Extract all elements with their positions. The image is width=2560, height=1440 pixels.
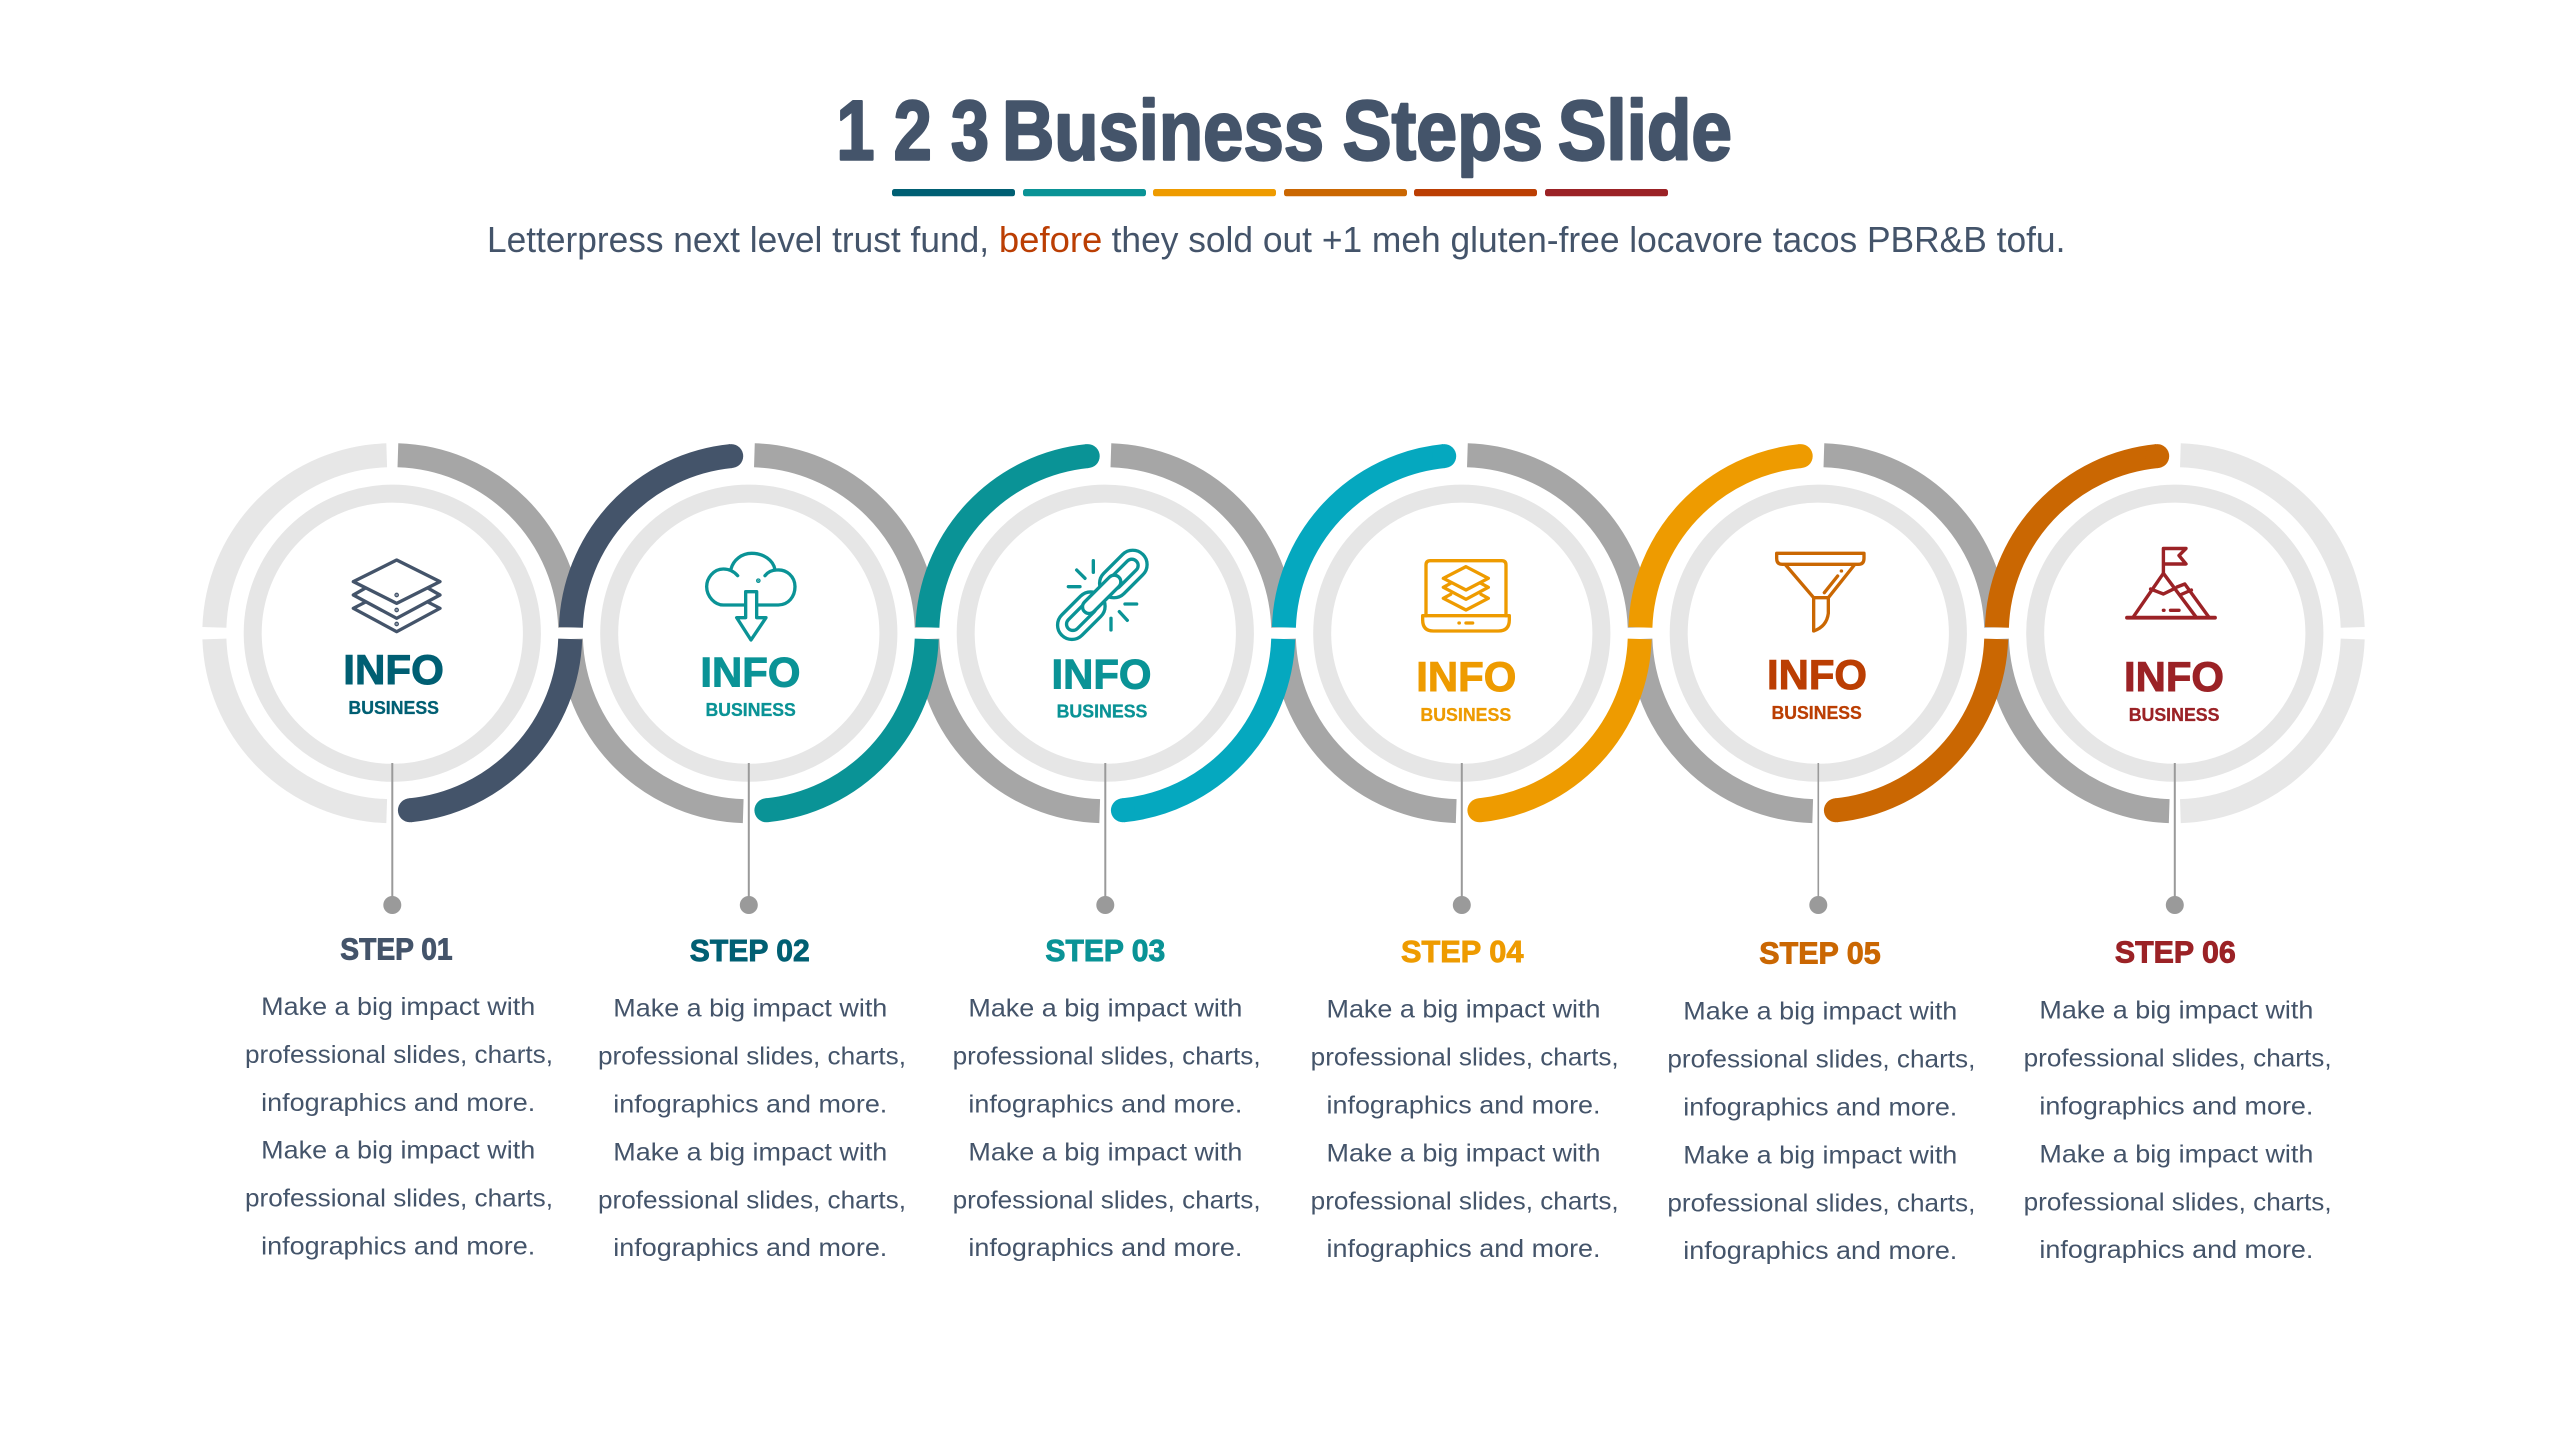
- description: infographics and more.: [1326, 1235, 1600, 1263]
- description: professional slides, charts,: [598, 1043, 906, 1071]
- description: Make a big impact with: [613, 995, 887, 1023]
- title: Steps: [1342, 84, 1543, 178]
- step heading: STEP 06: [2115, 934, 2236, 970]
- icon: funnel: [1777, 553, 1864, 631]
- description: infographics and more.: [613, 1234, 887, 1262]
- circle label: [2124, 653, 2224, 725]
- description: infographics and more.: [613, 1090, 887, 1118]
- panel: step 02: [571, 444, 927, 1262]
- description: professional slides, charts,: [245, 1185, 553, 1213]
- description: Make a big impact with: [1326, 996, 1600, 1024]
- circle label: INFO: [1052, 650, 1152, 697]
- title colour bars: [892, 189, 1668, 196]
- description: infographics and more.: [1683, 1094, 1957, 1122]
- step heading: STEP 02: [690, 933, 810, 968]
- circle label: INFO: [1416, 653, 1516, 700]
- circle label: INFO: [700, 648, 800, 695]
- description: professional slides, charts,: [953, 1043, 1261, 1071]
- description: infographics and more.: [968, 1090, 1242, 1118]
- panel: step 06: [1997, 444, 2332, 1264]
- description: professional slides, charts,: [598, 1186, 906, 1214]
- step heading: STEP 01: [340, 932, 453, 966]
- circle label: BUSINESS: [1420, 705, 1511, 725]
- icon: mountain with flag: [2127, 548, 2215, 618]
- connector: [740, 763, 758, 914]
- connector: [1096, 763, 1114, 914]
- circle label: BUSINESS: [706, 700, 796, 720]
- description: infographics and more.: [261, 1089, 535, 1117]
- description: [953, 995, 1261, 1262]
- title: 1 2 3: [836, 84, 989, 178]
- circle label: INFO: [1767, 651, 1867, 698]
- outer ring background tracks: [214, 455, 2353, 811]
- panel: step 05: [1640, 444, 1996, 1265]
- description: professional slides, charts,: [1311, 1187, 1619, 1215]
- circle label: BUSINESS: [1057, 702, 1147, 722]
- coloured arc step 06: [1997, 444, 2314, 773]
- description: [1311, 996, 1619, 1263]
- step heading: STEP 04: [1401, 934, 1524, 969]
- title: Business: [1002, 84, 1324, 178]
- subtitle: they sold out +1 meh gluten-free locavore tacos PBR&B tofu.: [1112, 219, 2065, 260]
- coloured arcs step 05: [1640, 444, 1996, 822]
- subtitle: Letterpress next level trust fund,: [487, 219, 989, 260]
- description: [245, 993, 553, 1260]
- circle label: BUSINESS: [1772, 703, 1862, 723]
- description: Make a big impact with: [1326, 1139, 1600, 1167]
- description: professional slides, charts,: [245, 1041, 553, 1069]
- description: infographics and more.: [1326, 1092, 1600, 1120]
- panel: step 01: [245, 494, 570, 1261]
- description: infographics and more.: [968, 1234, 1242, 1262]
- step heading: STEP 05: [1759, 936, 1881, 970]
- icon: cloud download: [707, 553, 795, 640]
- circle label: INFO: [2124, 653, 2224, 700]
- subtitle: before: [999, 219, 1102, 260]
- description: Make a big impact with: [1683, 1141, 1957, 1169]
- panel: step 03: [927, 444, 1283, 1262]
- description: Make a big impact with: [2039, 1140, 2313, 1168]
- connector: [383, 763, 401, 914]
- description: infographics and more.: [261, 1232, 535, 1260]
- description: Make a big impact with: [1683, 998, 1957, 1026]
- icon: layers: [353, 560, 440, 632]
- title: Slide: [1558, 84, 1732, 178]
- subtitle: [487, 219, 2065, 260]
- circle label: [343, 646, 444, 718]
- circle label: BUSINESS: [348, 698, 439, 718]
- description: Make a big impact with: [613, 1138, 887, 1166]
- description: professional slides, charts,: [1311, 1044, 1619, 1072]
- coloured arcs step 02: [571, 444, 927, 822]
- description: infographics and more.: [1683, 1237, 1957, 1265]
- circle label: [1416, 653, 1516, 725]
- description: [2024, 997, 2332, 1264]
- circle label: [1767, 651, 1867, 723]
- description: Make a big impact with: [261, 993, 535, 1021]
- icon: laptop with layers: [1423, 561, 1509, 631]
- circle label: BUSINESS: [2129, 705, 2220, 725]
- coloured arcs step 04: [1284, 444, 1640, 822]
- description: professional slides, charts,: [1667, 1046, 1975, 1074]
- icon: broken chain: [1052, 544, 1153, 645]
- circle label: [1052, 650, 1152, 722]
- description: infographics and more.: [2039, 1092, 2313, 1120]
- description: Make a big impact with: [261, 1137, 535, 1165]
- circle label: [700, 648, 800, 720]
- circle label: INFO: [343, 646, 444, 693]
- panel: step 04: [1284, 444, 1640, 1263]
- description: [1667, 998, 1975, 1265]
- description: Make a big impact with: [2039, 997, 2313, 1025]
- description: professional slides, charts,: [2024, 1188, 2332, 1216]
- step heading: STEP 03: [1045, 933, 1165, 968]
- connector: [1453, 763, 1471, 914]
- connector: [2166, 763, 2184, 914]
- description: professional slides, charts,: [953, 1186, 1261, 1214]
- description: professional slides, charts,: [2024, 1045, 2332, 1073]
- coloured arc step 01: [253, 494, 570, 822]
- description: professional slides, charts,: [1667, 1189, 1975, 1217]
- description: [598, 995, 906, 1262]
- description: Make a big impact with: [968, 1138, 1242, 1166]
- title: [836, 84, 1732, 178]
- connector: [1809, 763, 1827, 914]
- description: infographics and more.: [2039, 1236, 2313, 1264]
- description: Make a big impact with: [968, 995, 1242, 1023]
- coloured arcs step 03: [927, 444, 1283, 822]
